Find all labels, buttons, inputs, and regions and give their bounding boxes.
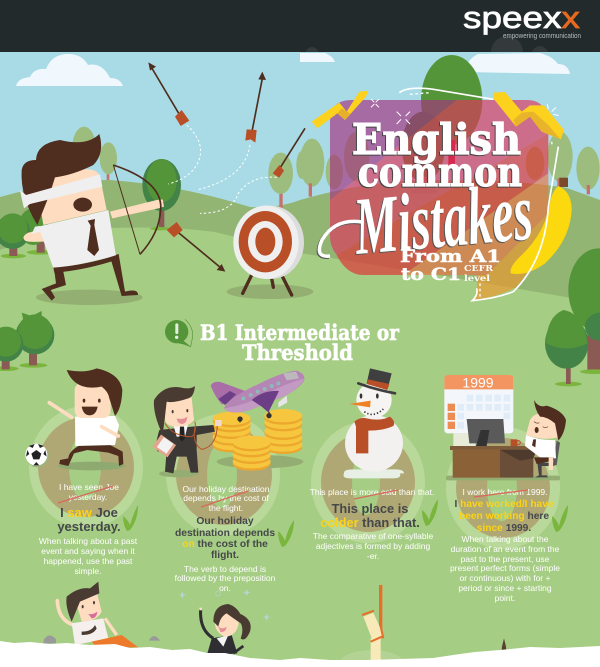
explanation: The verb to depend is <box>184 564 266 574</box>
incorrect sentence: This place is more cold than that. <box>310 487 434 497</box>
incorrect sentence: I work here from 1999. <box>462 487 548 497</box>
bow <box>113 165 161 254</box>
corrected sentence: been working here <box>459 511 549 522</box>
explanation: period or since + starting <box>458 583 552 593</box>
explanation: on. <box>219 583 231 593</box>
desk <box>450 446 537 450</box>
incorrect sentence: yesterday. <box>69 492 107 502</box>
incorrect sentence <box>58 482 119 503</box>
corrected sentence: colder than that. <box>320 515 420 530</box>
title <box>319 115 536 285</box>
title: English <box>352 115 521 164</box>
man <box>553 441 560 466</box>
explanation: point. <box>495 593 515 603</box>
monitor <box>467 419 505 443</box>
corrected sentence: flight. <box>211 550 239 561</box>
corrected sentence: I have worked/I have <box>454 499 554 510</box>
example 2: depends on <box>175 484 294 593</box>
logo: speexx: speex x <box>463 0 581 35</box>
target rings behind the examples <box>29 406 560 549</box>
hand holding a scroll <box>338 585 405 667</box>
torn paper bottom edge <box>0 641 600 667</box>
corrected sentence: since 1999. <box>477 523 531 534</box>
incorrect sentence: depends by the cost of <box>183 493 269 503</box>
trees right of heading <box>545 248 600 386</box>
corrected sentence <box>454 499 554 534</box>
back arm <box>23 230 67 242</box>
calendar: 1999 <box>462 374 494 390</box>
corrected sentence: on the cost of the <box>182 539 268 550</box>
title: to C1 <box>401 265 461 285</box>
incorrect sentence <box>183 484 270 513</box>
example 1: saw <box>39 482 138 576</box>
title: common <box>358 149 522 196</box>
example 3: colder <box>310 487 438 561</box>
corrected sentence: This place is <box>332 501 408 516</box>
archer character <box>20 134 164 305</box>
blindfold <box>20 174 102 208</box>
explanation: When talking about the <box>462 534 549 544</box>
icon: check mark <box>422 499 438 526</box>
bow arm <box>110 199 164 218</box>
scenery trees behind the archer <box>0 127 307 258</box>
explanation: present perfect forms (simple <box>450 563 560 573</box>
arrows and dashed flight paths <box>148 62 305 272</box>
icon: check mark <box>278 520 294 547</box>
doctor character <box>152 386 222 477</box>
explanation: simple. <box>75 566 101 576</box>
title: CEFR <box>464 263 493 273</box>
banana <box>511 178 572 274</box>
church spire <box>501 638 507 653</box>
explanation: The comparative of one-syllable <box>313 531 434 541</box>
corrected sentence <box>57 505 121 534</box>
corrected sentence: destination depends <box>175 528 275 539</box>
corrected sentence: Our holiday <box>196 516 254 527</box>
title: level <box>464 273 490 283</box>
trees behind the title <box>300 55 600 197</box>
explanation: event and saying when it <box>41 546 135 556</box>
example 4: have worked <box>450 487 568 603</box>
archer's target <box>227 206 313 299</box>
icon: exclamation speech bubble <box>165 319 193 347</box>
icon: check mark <box>552 505 568 532</box>
explanation <box>450 534 560 603</box>
corrected sentence <box>320 501 420 530</box>
icon: check mark <box>123 505 138 531</box>
explanation: happened, use the past <box>44 556 133 566</box>
incorrect sentence: the flight. <box>209 503 243 513</box>
explanation: or continuous) with for + <box>460 573 551 583</box>
plane <box>211 371 304 422</box>
incorrect sentence: I have seen Joe <box>59 482 119 492</box>
explanation: duration of an event from the <box>451 544 560 554</box>
hair <box>22 134 101 225</box>
logo: speexx: empowering communication <box>503 31 581 40</box>
soccer character <box>25 368 126 470</box>
explanation: past to the present, use <box>461 554 550 564</box>
trees left of heading <box>0 311 54 371</box>
legs <box>42 254 138 301</box>
corrected sentence <box>175 516 275 561</box>
explanation <box>175 564 276 593</box>
boy reading a book <box>43 582 160 647</box>
explanation <box>39 536 138 576</box>
explanation: When talking about a past <box>39 536 138 546</box>
heading: Threshold <box>242 340 353 365</box>
explanation: adjectives is formed by adding <box>316 541 430 551</box>
explanation: -er. <box>367 551 379 561</box>
office worker at desk <box>444 374 566 480</box>
explanation: followed by the preposition <box>175 573 276 583</box>
snowman <box>343 368 404 478</box>
explanation <box>313 531 434 561</box>
heading: B1 Intermediate or <box>200 320 400 345</box>
corrected sentence: yesterday. <box>57 519 121 534</box>
incorrect sentence: Our holiday destination <box>183 484 270 494</box>
businesswoman <box>178 589 271 656</box>
head <box>37 169 107 225</box>
icon: yellow zigzag arrows <box>312 91 564 139</box>
clouds <box>16 53 570 86</box>
coin stacks <box>213 409 303 471</box>
title outline and sparkles <box>371 88 559 301</box>
icon: soccer ball <box>25 444 49 467</box>
corrected sentence: I saw Joe <box>60 505 118 520</box>
title: From A1 <box>400 247 501 267</box>
panel: title background <box>330 100 548 300</box>
header bar <box>0 0 600 52</box>
heading <box>200 320 400 365</box>
